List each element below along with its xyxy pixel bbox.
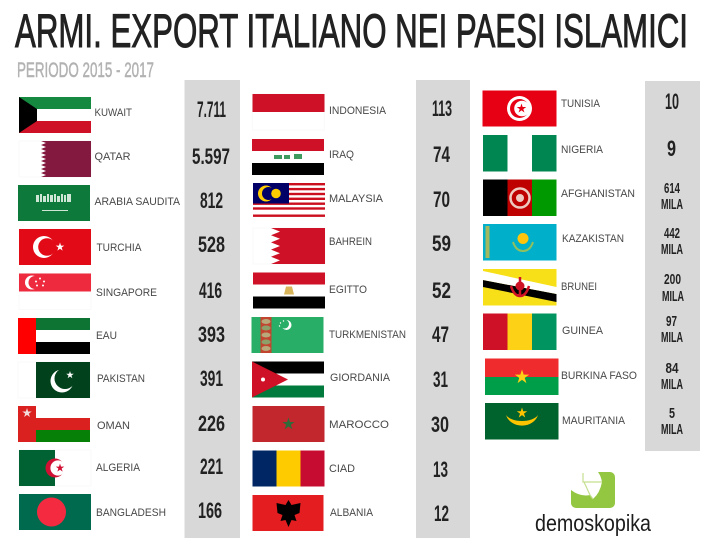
- row: Burkina Faso: [485, 358, 683, 395]
- row: Kuwait: [19, 97, 226, 133]
- row: Morocco: 30: [431, 412, 449, 437]
- value column 2 background: [416, 80, 470, 538]
- row: Bahrain: [253, 228, 451, 264]
- row: Saudi Arabia: ARABIA SAUDITA: [94, 196, 181, 208]
- row: Bangladesh: BANGLADESH: [96, 507, 166, 519]
- row: Malaysia: MALAYSIA: [329, 193, 384, 205]
- row: Pakistan: 391: [200, 366, 223, 391]
- row: Bangladesh: [19, 494, 222, 530]
- row: Burkina Faso: 84: [666, 360, 679, 377]
- row: Singapore: [19, 274, 222, 310]
- row: Bangladesh: 166: [198, 498, 222, 523]
- row: Brunei: 200: [664, 271, 681, 288]
- value column 3 background: [645, 81, 700, 451]
- row: Turkey: TURCHIA: [96, 242, 142, 254]
- row: Malaysia: 70: [433, 187, 450, 212]
- row: Iraq: 74: [433, 142, 451, 167]
- row: Brunei: BRUNEI: [561, 281, 597, 293]
- row: Oman: OMAN: [97, 420, 130, 432]
- row: Algeria: ALGERIA: [96, 462, 141, 474]
- row: Nigeria: [483, 135, 676, 172]
- row: Pakistan: PAKISTAN: [97, 373, 145, 385]
- row: Tunisia: TUNISIA: [561, 98, 601, 110]
- row: Jordan: [252, 362, 448, 398]
- row: Pakistan: [18, 362, 223, 398]
- row: Saudi Arabia: [18, 185, 223, 221]
- row: Kuwait: 7.711: [197, 97, 226, 122]
- row: Singapore: SINGAPORE: [96, 287, 157, 299]
- row: Egypt: EGITTO: [329, 284, 367, 296]
- row: Bahrain: BAHREIN: [329, 236, 372, 248]
- row: Turkmenistan: 47: [432, 322, 449, 347]
- row: Tunisia: [482, 89, 679, 126]
- row: Malaysia: [253, 183, 450, 217]
- row: Singapore: 416: [199, 278, 222, 303]
- row: Oman: [18, 406, 225, 442]
- row: Jordan: GIORDANIA: [330, 372, 391, 384]
- row: Morocco: [252, 406, 449, 442]
- logo: demoskopika: [535, 472, 651, 536]
- row: Guinea: MILA: [661, 329, 683, 346]
- row: Guinea: GUINEA: [562, 325, 604, 337]
- row: Albania: ALBANIA: [330, 507, 374, 519]
- row: Mauritania: MILA: [661, 421, 683, 438]
- row: Chad: [252, 450, 448, 486]
- row: Algeria: [19, 450, 223, 486]
- row: Brunei: MILA: [662, 288, 684, 305]
- row: Guinea: 97: [666, 313, 677, 330]
- icon: logo mark: [571, 472, 615, 508]
- row: Qatar: 5.597: [192, 144, 230, 169]
- value column 1 background: [184, 80, 240, 538]
- row: Chad: CIAD: [329, 463, 355, 475]
- row: Kazakhstan: MILA: [661, 241, 683, 258]
- subtitle: period: PERIODO 2015 - 2017: [17, 59, 154, 82]
- row: Nigeria: NIGERIA: [561, 144, 604, 156]
- row: Bahrain: 59: [432, 231, 451, 256]
- row: Mauritania: 5: [669, 405, 675, 422]
- row: Iraq: IRAQ: [329, 149, 354, 161]
- row: Egypt: 52: [432, 278, 451, 303]
- row: Tunisia: 10: [665, 89, 679, 114]
- row: Kazakhstan: 442: [664, 225, 680, 242]
- row: Egypt: [253, 272, 451, 308]
- row: Afghanistan: 614: [664, 180, 680, 197]
- row: Indonesia: 113: [432, 96, 452, 121]
- row: Guinea: [483, 313, 683, 350]
- row: Indonesia: [252, 94, 452, 130]
- row: Turkey: [19, 229, 225, 265]
- row: Turkmenistan: TURKMENISTAN: [329, 329, 406, 341]
- row: Morocco: MAROCCO: [329, 419, 389, 431]
- row: Qatar: QATAR: [94, 151, 131, 163]
- row: Algeria: 221: [200, 454, 223, 479]
- row: Afghanistan: MILA: [661, 196, 683, 213]
- row: Iraq: [252, 139, 451, 175]
- row: Mauritania: MAURITANIA: [562, 415, 626, 427]
- logo wordmark: demoskopika: [535, 510, 651, 536]
- row: UAE: [18, 318, 225, 354]
- row: Kazakhstan: [483, 224, 683, 260]
- row: Nigeria: 9: [667, 136, 676, 161]
- row: Turkey: 528: [198, 232, 225, 257]
- row: Jordan: 31: [433, 367, 448, 392]
- row: Kuwait: KUWAIT: [94, 107, 132, 119]
- row: Burkina Faso: MILA: [661, 376, 683, 393]
- row: UAE: 393: [198, 322, 225, 347]
- row: Indonesia: INDONESIA: [329, 105, 387, 117]
- row: Chad: 13: [433, 457, 448, 482]
- row: Albania: 12: [434, 501, 449, 526]
- row: Qatar: [19, 141, 230, 177]
- row: Albania: [252, 495, 449, 531]
- row: Saudi Arabia: 812: [200, 188, 223, 213]
- row: Kazakhstan: KAZAKISTAN: [562, 233, 624, 245]
- row: UAE: EAU: [96, 330, 117, 342]
- row: Brunei: [483, 269, 684, 306]
- row: Afghanistan: [483, 180, 683, 216]
- row: Burkina Faso: BURKINA FASO: [561, 370, 637, 382]
- row: Turkmenistan: [252, 317, 449, 353]
- row: Mauritania: [485, 403, 683, 440]
- row: Afghanistan: AFGHANISTAN: [561, 188, 635, 200]
- row: Oman: 226: [198, 411, 225, 436]
